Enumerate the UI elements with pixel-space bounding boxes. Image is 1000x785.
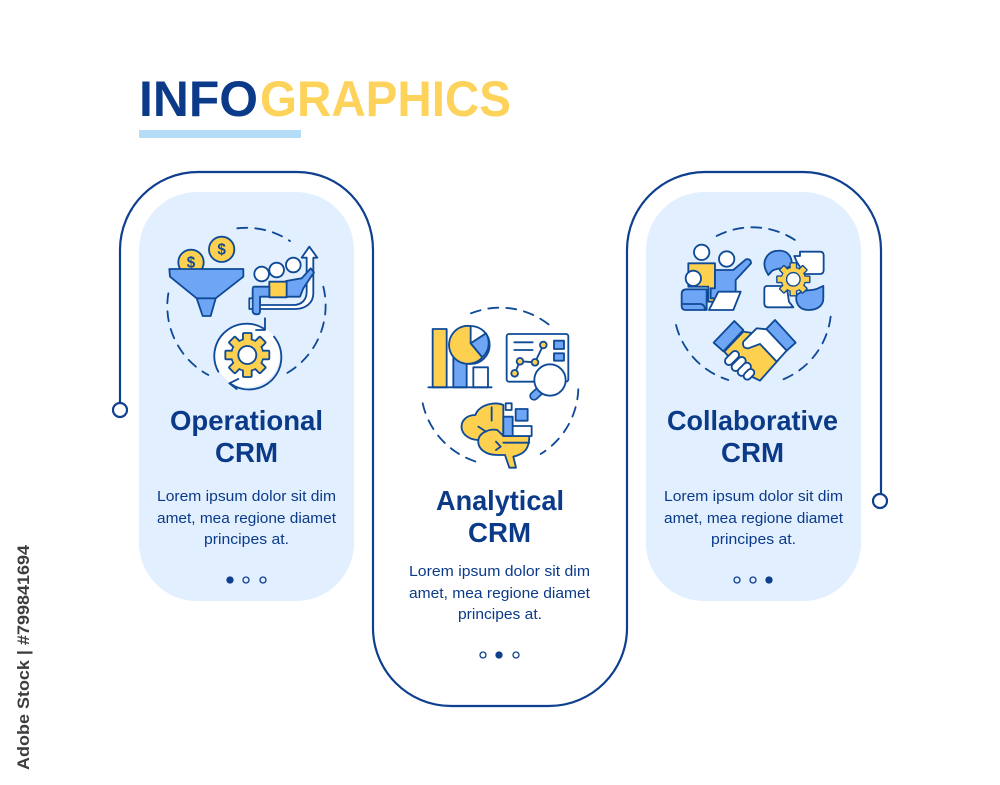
heading: CRM	[721, 437, 784, 468]
pagination dots	[734, 577, 772, 583]
body text	[157, 488, 337, 548]
heading: CRM	[215, 437, 278, 468]
panel: analytical CRM	[409, 308, 591, 658]
title	[139, 71, 511, 138]
body text: Lorem ipsum dolor sit dim	[409, 563, 590, 580]
panel: collaborative CRM	[646, 192, 861, 601]
body text: principes at.	[204, 531, 289, 548]
title: GRAPHICS	[260, 71, 511, 127]
body text: amet, mea regione diamet	[157, 510, 337, 527]
pagination dots	[227, 577, 266, 583]
icon: funnel, team growth and gear: $	[187, 255, 196, 272]
timeline outline connecting the panels	[113, 172, 887, 706]
body text: amet, mea regione diamet	[409, 585, 591, 602]
body text	[409, 563, 591, 623]
pagination dots	[480, 652, 519, 658]
heading: CRM	[468, 517, 531, 548]
body text: principes at.	[458, 606, 542, 623]
heading	[436, 485, 564, 548]
panel: operational CRM	[139, 192, 354, 601]
body text	[664, 488, 844, 548]
icon: team, chat gear and handshake	[676, 227, 831, 381]
heading: Collaborative	[667, 405, 838, 436]
heading: Analytical	[436, 485, 564, 516]
stock credit: Adobe Stock | #799841694	[14, 544, 33, 770]
body text: Lorem ipsum dolor sit dim	[157, 488, 336, 505]
icon: funnel, team growth and gear: $	[217, 242, 226, 259]
title: INFO	[139, 71, 258, 127]
icon: funnel, team growth and gear	[167, 228, 326, 389]
body text: Lorem ipsum dolor sit dim	[664, 488, 843, 505]
body text: amet, mea regione diamet	[664, 510, 844, 527]
body text: principes at.	[711, 531, 796, 548]
icon: charts, dashboard and brain	[423, 308, 578, 468]
heading	[667, 405, 838, 468]
heading: Operational	[170, 405, 323, 436]
heading	[170, 405, 323, 468]
